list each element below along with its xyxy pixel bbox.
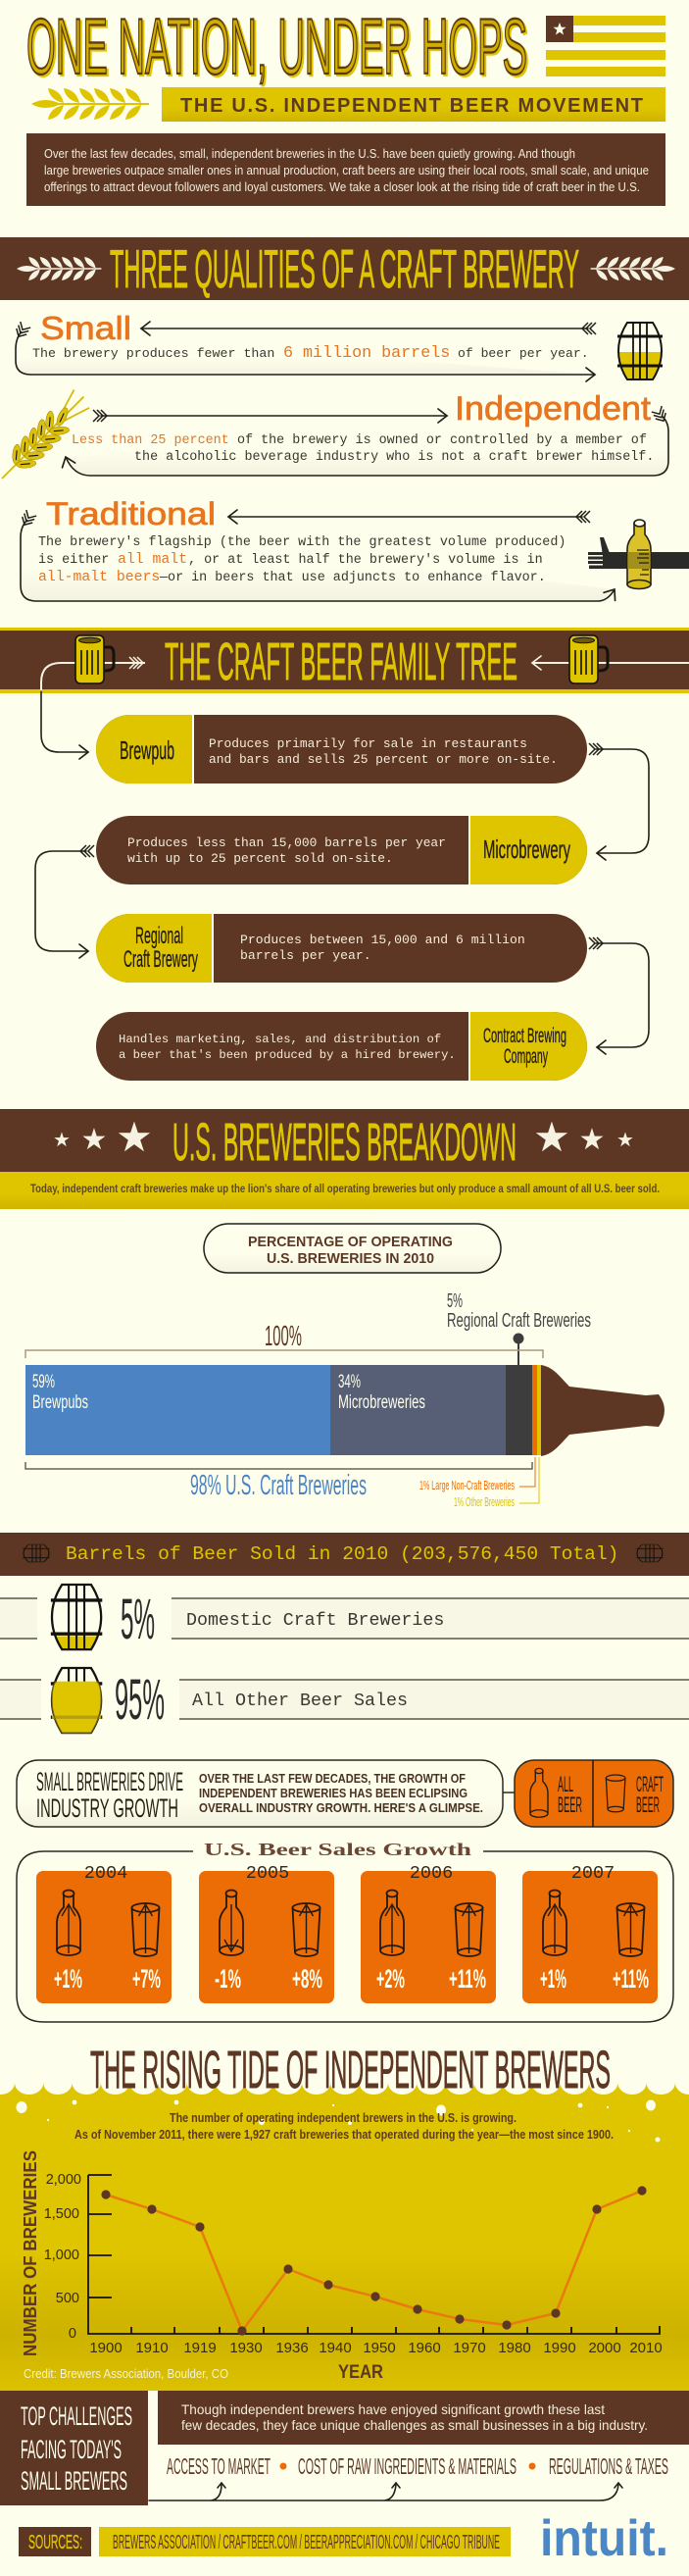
pill: microbrewery [96,816,587,884]
subtitle banner [162,87,665,122]
data line [106,2191,642,2331]
panel: rising tide background [0,2083,689,2391]
chart heading pill: PERCENTAGE OF OPERATING [248,1234,453,1250]
legend: BEER [558,1793,582,1817]
100 percent bracket [25,1321,543,1358]
line chart: number of breweries [20,2150,663,2383]
x axis labels: 1940 [319,2340,352,2356]
row: all other beer sales [0,1668,689,1733]
y axis labels: 500 [56,2291,79,2306]
row: domestic craft breweries: 5% [121,1588,155,1651]
row: domestic craft breweries [0,1585,689,1651]
quality: traditional: Traditional [46,496,216,531]
y axis labels [44,2172,81,2342]
x axis labels: 1980 [498,2340,531,2356]
quality: independent: of the brewery is owned or controlled by a member of [237,433,647,448]
card: 2004: 2004 [84,1863,127,1884]
regional callout [447,1290,591,1365]
quality: small [14,310,596,381]
row: domestic craft breweries: Domestic Craft Breweries [186,1611,444,1631]
data points [101,2186,647,2336]
quality: traditional [20,496,620,601]
pill: contract brewing company: Contract Brewing [483,1025,566,1047]
arrows: challenges [149,2483,622,2500]
card: 2007: +11% [613,1964,649,1994]
brewpubs label [32,1372,88,1413]
bar segments [25,1365,664,1456]
craft breweries bracket: 98% U.S. Craft Breweries [190,1470,367,1501]
card: 2006 [361,1863,496,2003]
quality: traditional: all malt [118,552,187,568]
band: barrels sold [0,1533,689,1576]
panel: small breweries drive growth: OVER THE LAST FEW DECADES, THE GROWTH OF [199,1772,466,1786]
bottle bar chart [25,1290,664,1509]
card: 2007 [522,1863,658,2003]
x axis labels: 1960 [408,2340,441,2356]
panel: small breweries drive growth [17,1760,503,1827]
intro text panel: Over the last few decades, small, independent breweries in the U.S. have been quietly growing. And though [44,146,575,161]
quality: small: The brewery produces fewer than [32,346,274,361]
y axis title: NUMBER OF BREWERIES [20,2150,40,2356]
quality: traditional: The brewery's flagship (the beer with the greatest volume produced) [38,535,566,550]
x axis labels: 1990 [543,2340,576,2356]
pill: brewpub [96,715,587,783]
quality: small: Small [40,310,131,346]
quality: independent: Independent [455,390,652,428]
pill: contract brewing company: Company [504,1045,548,1068]
legend: ALL [558,1772,573,1796]
pill: regional craft brewery: Produces between 15,000 and 6 million [240,933,525,947]
100 percent bracket: 100% [265,1321,302,1352]
x axis labels: 1936 [275,2340,309,2356]
pill: regional craft brewery: Craft Brewery [123,946,198,973]
x axis labels [89,2340,663,2356]
row: all other beer sales: 95% [115,1668,165,1732]
sources: SOURCES: [28,2532,82,2553]
band: barrels sold: Barrels of Beer Sold in 2010 (203,576,450 Total) [66,1543,618,1565]
heading band: breweries breakdown: ★ [533,1114,570,1160]
panel: beer sales growth [17,1840,673,2022]
heading band: breweries breakdown: ★ [53,1130,71,1151]
chart heading pill: U.S. BREWERIES IN 2010 [267,1250,434,1267]
small segment labels [419,1457,539,1509]
heading band: breweries breakdown: ★ [81,1124,107,1156]
card: 2005 [199,1863,334,2003]
quality: traditional: is either [38,553,109,568]
quality: traditional: , or at least half the brewery's volume is in [188,553,543,568]
card: 2004: +7% [132,1964,161,1994]
quality: independent: the alcoholic beverage industry who is not a craft brewer himself. [134,450,654,465]
pill: contract brewing company: a beer that's been produced by a hired brewery. [119,1048,456,1062]
panel: challenges intro: few decades, they face unique challenges as small businesses in a big industry. [181,2417,648,2433]
y axis labels: 0 [69,2326,76,2342]
axes [88,2175,660,2334]
brewpubs label: 59% [32,1372,55,1392]
x axis title: YEAR [338,2362,383,2383]
arrow: to brewpub [41,691,88,759]
icon: hand holding bottle [588,520,689,588]
craft breweries bracket [25,1462,532,1501]
brewpubs label: Brewpubs [32,1392,88,1413]
card: 2007: +1% [540,1964,566,1994]
card: 2004 [36,1863,172,2003]
y axis labels: 1,000 [44,2248,79,2263]
chart heading pill [204,1224,501,1273]
heading band: family tree [0,628,689,693]
pill: regional craft brewery [96,914,587,983]
y axis labels: 2,000 [46,2172,81,2188]
microbreweries label: Microbreweries [338,1392,425,1413]
logo: intuit: intuit. [540,2510,668,2567]
quality: small: 6 million barrels [283,344,450,363]
heading band: breweries breakdown: ★ [579,1124,605,1156]
panel: top challenges [0,2391,148,2505]
small segment labels: 1% Large Non-Craft Breweries [419,1478,515,1492]
row: all other beer sales: All Other Beer Sales [192,1692,408,1711]
regional callout: 5% [447,1290,463,1312]
panel: challenges intro: Though independent brewers have enjoyed significant growth these last [181,2401,605,2417]
arrow: brewpub to microbrewery [589,743,649,860]
microbreweries label: 34% [338,1372,361,1392]
text: tide intro: The number of operating independent brewers in the U.S. is growing. [170,2110,517,2125]
pill: brewpub: and bars and sells 25 percent or more on-site. [209,752,558,767]
quality: independent [59,390,668,476]
yellow intro strip [0,1172,689,1209]
bubbles [16,2100,661,2142]
pill: microbrewery: Microbrewery [483,834,570,864]
card: 2006: +2% [376,1964,405,1994]
card: 2007: 2007 [571,1863,615,1884]
panel: small breweries drive growth: OVERALL INDUSTRY GROWTH. HERE'S A GLIMPSE. [199,1801,483,1815]
y axis labels: 1,500 [44,2206,79,2222]
panel: top challenges: FACING TODAY'S [21,2435,122,2464]
challenge list: ACCESS TO MARKET [167,2453,271,2479]
microbreweries label [338,1372,425,1413]
arrow: microbrewery to regional [35,845,94,958]
pill: microbrewery: with up to 25 percent sold on-site. [127,851,393,866]
small segment labels: 1% Other Breweries [454,1494,515,1509]
card: 2004: +1% [54,1964,82,1994]
panel: small breweries drive growth: INDEPENDENT BREWERIES HAS BEEN ECLIPSING [199,1787,468,1800]
subtitle banner: THE U.S. INDEPENDENT BEER MOVEMENT [180,95,643,117]
text: tide intro [74,2110,614,2142]
pill: brewpub: Brewpub [120,735,174,765]
x axis labels: 1919 [183,2340,217,2356]
icon: flag [546,16,665,76]
pill: contract brewing company: Handles marketing, sales, and distribution of [119,1033,441,1046]
x axis labels: 2000 [588,2340,621,2356]
card: 2006: +11% [449,1964,486,1994]
panel: small breweries drive growth: SMALL BREWERIES DRIVE [36,1767,183,1796]
card: 2006: 2006 [410,1863,453,1884]
x axis labels: 1970 [453,2340,486,2356]
quality: independent: Less than 25 percent [72,433,229,448]
panel: beer sales growth: U.S. Beer Sales Growth [204,1840,471,1859]
icon: wheat stalk [0,385,95,490]
x axis labels: 1930 [229,2340,263,2356]
x axis labels: 1950 [363,2340,396,2356]
quality: traditional: —or in beers that use adjuncts to enhance flavor. [159,571,546,585]
arrow: regional to contract [589,937,649,1054]
quality: small: of beer per year. [458,346,589,361]
intro text panel [26,133,665,206]
icon: wheat sprig [31,88,149,120]
pill: regional craft brewery: barrels per year. [240,948,371,963]
pill: microbrewery: Produces less than 15,000 barrels per year [127,835,446,850]
panel: small breweries drive growth: INDUSTRY GROWTH [36,1793,178,1823]
heading band: breweries breakdown: ★ [616,1130,634,1151]
panel: top challenges: TOP CHALLENGES [21,2401,132,2431]
x axis labels: 1900 [89,2340,123,2356]
legend [503,1760,673,1827]
panel: top challenges: SMALL BREWERS [21,2466,127,2496]
pill: brewpub: Produces primarily for sale in restaurants [209,736,527,751]
pill: regional craft brewery: Regional [135,923,183,949]
x axis labels: 1910 [135,2340,169,2356]
icon: barrel [617,323,663,379]
x axis labels: 2010 [629,2340,663,2356]
card: 2005: +8% [292,1964,322,1994]
regional callout: Regional Craft Breweries [447,1310,591,1332]
card: 2005: -1% [215,1964,241,1994]
heading band: breweries breakdown: ★ [116,1114,153,1160]
pill: contract brewing company [96,1012,587,1081]
panel: challenges intro [158,2391,689,2445]
credit: Credit: Brewers Association, Boulder, CO [24,2366,228,2381]
card: 2005: 2005 [246,1863,289,1884]
quality: traditional: all-malt beers [38,570,160,585]
sources [19,2527,511,2556]
